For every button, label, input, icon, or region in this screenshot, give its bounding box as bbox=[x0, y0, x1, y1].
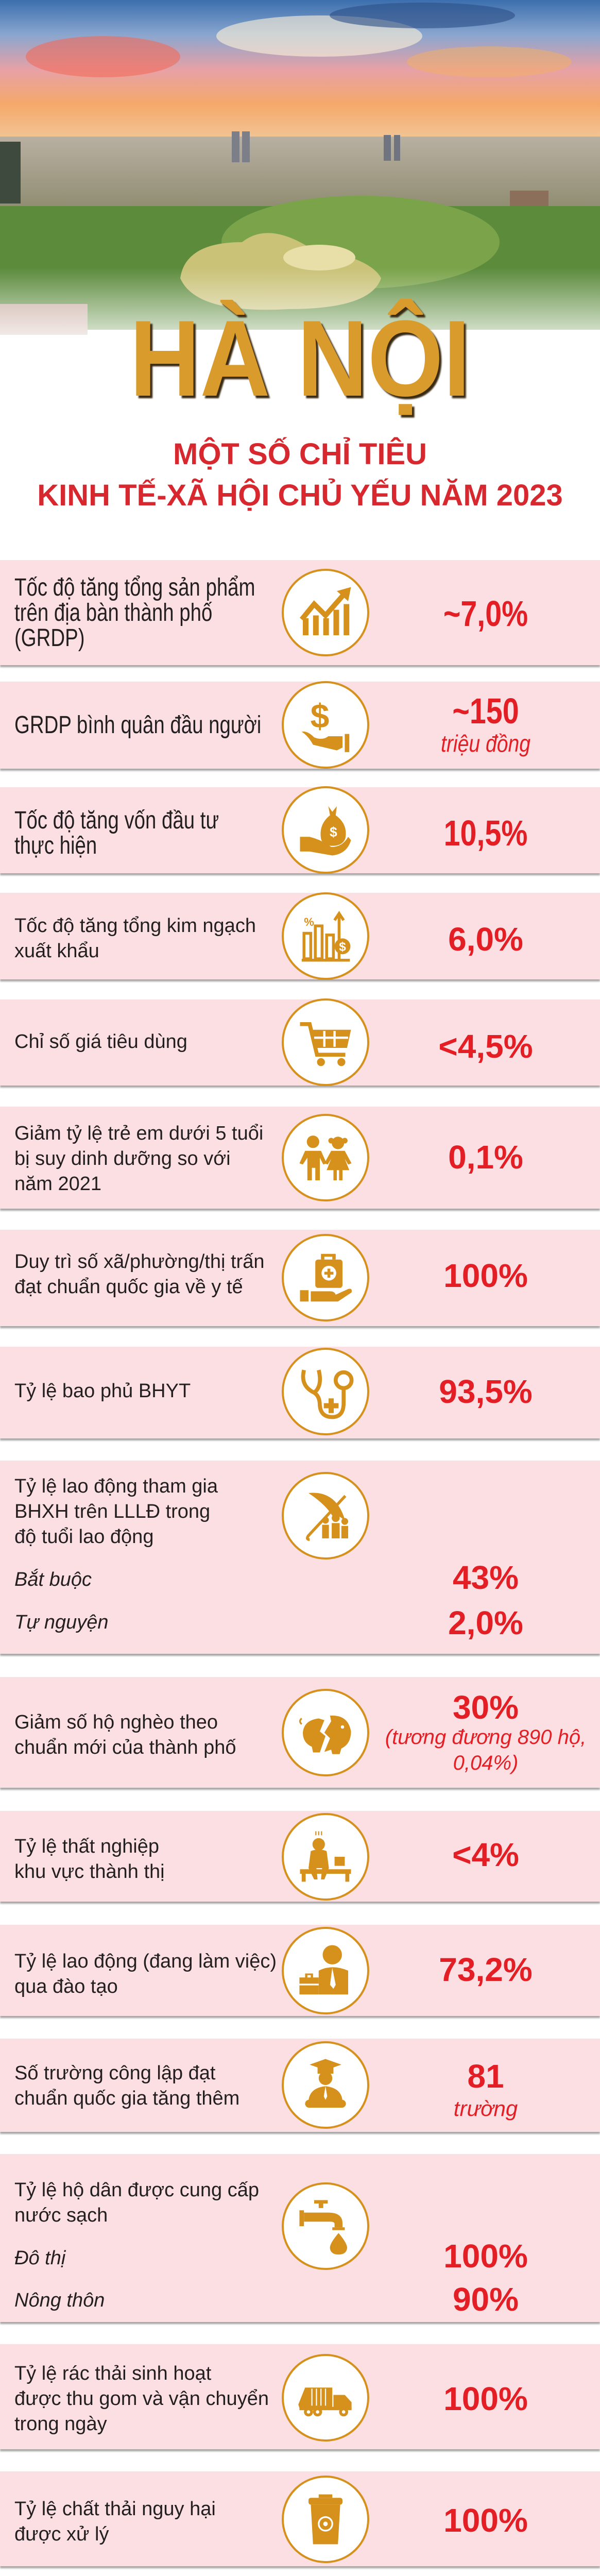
label bbox=[14, 1251, 264, 1298]
sub-label: Nông thôn: Nông thôn bbox=[14, 2290, 105, 2311]
value: 10,5% bbox=[444, 813, 527, 853]
value: 30%: 30% bbox=[453, 1689, 519, 1726]
value note bbox=[385, 1726, 586, 1774]
label: trong ngày bbox=[14, 2413, 107, 2435]
icon: hand with dollar: $ bbox=[311, 697, 329, 735]
label: Tỷ lệ thất nghiệp bbox=[14, 1836, 159, 1857]
value: ~150 bbox=[452, 691, 519, 731]
sub-label: Bắt buộc: Bắt buộc bbox=[14, 1569, 92, 1590]
icon: stethoscope bbox=[282, 1348, 369, 1435]
label bbox=[14, 1123, 263, 1195]
label: Tỷ lệ rác thải sinh hoạt bbox=[14, 2363, 211, 2384]
panel: GRDP growth bbox=[0, 560, 600, 665]
icon: garbage truck bbox=[282, 2354, 369, 2442]
value note: 0,04%) bbox=[453, 1752, 518, 1774]
label: Giảm số hộ nghèo theo bbox=[14, 1711, 218, 1733]
value: 100% bbox=[443, 2380, 528, 2417]
panel: hazardous waste bbox=[0, 2471, 600, 2566]
value: <4,5% bbox=[438, 1028, 533, 1065]
label: Số trường công lập đạt bbox=[14, 2062, 215, 2084]
icon: shopping cart bbox=[282, 998, 369, 1086]
value: 6,0% bbox=[448, 921, 523, 958]
label: Chỉ số giá tiêu dùng bbox=[14, 1031, 187, 1053]
icon: chart with coin: % bbox=[304, 916, 314, 928]
label: Tốc độ tăng tổng kim ngạch bbox=[14, 915, 256, 937]
label: Tỷ lệ lao động tham gia bbox=[14, 1476, 218, 1497]
value: 43%: 43% bbox=[453, 1559, 519, 1596]
label: Tỷ lệ bao phủ BHYT bbox=[14, 1380, 191, 1402]
label bbox=[14, 2062, 239, 2109]
label: chuẩn quốc gia tăng thêm bbox=[14, 2088, 239, 2109]
label bbox=[14, 1836, 165, 1883]
sub-label: Tự nguyện: Tự nguyện bbox=[14, 1612, 109, 1633]
panel: clean water bbox=[0, 2154, 600, 2322]
label: qua đào tạo bbox=[14, 1976, 118, 1997]
label bbox=[14, 1711, 236, 1758]
label: Duy trì số xã/phường/thị trấn bbox=[14, 1251, 264, 1273]
sub-label: Đô thị: Đô thị bbox=[14, 2247, 65, 2269]
icon: money bag bbox=[282, 786, 369, 874]
icon: rising chart bbox=[282, 569, 369, 656]
label bbox=[14, 807, 219, 859]
icon: broken piggy bank bbox=[282, 1689, 369, 1776]
label: bị suy dinh dưỡng so với bbox=[14, 1148, 231, 1170]
panel: trained labour bbox=[0, 1925, 600, 2016]
label: xuất khẩu bbox=[14, 940, 99, 962]
icon: tap with drop bbox=[282, 2182, 369, 2270]
label: Giảm tỷ lệ trẻ em dưới 5 tuổi bbox=[14, 1123, 263, 1144]
panel: health insurance bbox=[0, 1347, 600, 1438]
label: Tốc độ tăng vốn đầu tư bbox=[14, 807, 219, 834]
subtitle bbox=[37, 437, 563, 512]
label bbox=[14, 574, 255, 652]
value: 73,2% bbox=[439, 1951, 533, 1988]
value: 0,1% bbox=[448, 1139, 523, 1176]
label: chuẩn mới của thành phố bbox=[14, 1737, 236, 1758]
panel: unemployment bbox=[0, 1811, 600, 1902]
label: (GRDP) bbox=[14, 624, 85, 652]
label: GRDP bình quân đầu người bbox=[14, 711, 261, 739]
icon: hand with dollar bbox=[282, 681, 369, 769]
icon: chart with coin: $ bbox=[339, 940, 346, 954]
panel: schools bbox=[0, 2039, 600, 2132]
value: ~7,0% bbox=[443, 594, 528, 634]
label: trên địa bàn thành phố bbox=[14, 599, 212, 626]
value: 2,0%: 2,0% bbox=[448, 1604, 523, 1641]
panel: domestic waste bbox=[0, 2344, 600, 2449]
title: HÀ NỘI: HÀ NỘI bbox=[130, 298, 470, 419]
label bbox=[14, 1476, 218, 1548]
value: 81 bbox=[467, 2058, 504, 2095]
label: độ tuổi lao động bbox=[14, 1526, 153, 1548]
icon: worker with briefcase bbox=[282, 1927, 369, 2014]
icon: money bag: $ bbox=[330, 824, 337, 840]
label: BHXH trên LLLĐ trong bbox=[14, 1501, 210, 1522]
label: được thu gom và vận chuyển bbox=[14, 2388, 269, 2410]
value: <4% bbox=[452, 1836, 519, 1873]
label: đạt chuẩn quốc gia về y tế bbox=[14, 1276, 243, 1298]
label bbox=[14, 1951, 277, 1997]
label: nước sạch bbox=[14, 2205, 108, 2226]
label bbox=[14, 915, 256, 962]
label: Tỷ lệ chất thải nguy hại bbox=[14, 2498, 216, 2520]
value: 100% bbox=[443, 2502, 528, 2539]
panel: health standard bbox=[0, 1230, 600, 1326]
icon: medical kit bbox=[282, 1234, 369, 1321]
label: khu vực thành thị bbox=[14, 1861, 165, 1883]
panel: child malnutrition bbox=[0, 1107, 600, 1209]
header photo: Hanoi cityscape bbox=[0, 0, 600, 335]
label bbox=[14, 2498, 216, 2545]
icon: children bbox=[282, 1114, 369, 1201]
label: Tỷ lệ lao động (đang làm việc) bbox=[14, 1951, 277, 1972]
value: 90%: 90% bbox=[453, 2281, 519, 2318]
value unit: triệu đồng bbox=[441, 730, 530, 757]
value unit: trường bbox=[454, 2096, 518, 2121]
value: 100% bbox=[443, 1257, 528, 1294]
value note: (tương đương 890 hộ, bbox=[385, 1726, 586, 1749]
label bbox=[14, 2179, 259, 2226]
panel: poverty bbox=[0, 1677, 600, 1788]
value: 93,5% bbox=[439, 1373, 533, 1410]
panel: export bbox=[0, 893, 600, 979]
icon: umbrella family bbox=[282, 1472, 369, 1560]
label: được xử lý bbox=[14, 2523, 109, 2545]
label: Tốc độ tăng tổng sản phẩm bbox=[14, 574, 255, 601]
panel: GRDP per capita bbox=[0, 682, 600, 769]
icon: biohazard bin bbox=[282, 2476, 369, 2563]
value: 100%: 100% bbox=[443, 2238, 528, 2275]
icon: graduate bbox=[282, 2041, 369, 2129]
label: thực hiện bbox=[14, 832, 97, 859]
subtitle: KINH TẾ-XÃ HỘI CHỦ YẾU NĂM 2023 bbox=[37, 479, 563, 512]
label bbox=[14, 2363, 269, 2435]
panel: social insurance bbox=[0, 1461, 600, 1654]
label: năm 2021 bbox=[14, 1173, 101, 1195]
label: Tỷ lệ hộ dân được cung cấp bbox=[14, 2179, 259, 2201]
icon: chart with coin bbox=[282, 892, 369, 980]
panel: investment bbox=[0, 787, 600, 873]
icon: worried man on bench bbox=[282, 1813, 369, 1901]
subtitle: MỘT SỐ CHỈ TIÊU bbox=[173, 437, 427, 471]
panel: CPI bbox=[0, 999, 600, 1086]
